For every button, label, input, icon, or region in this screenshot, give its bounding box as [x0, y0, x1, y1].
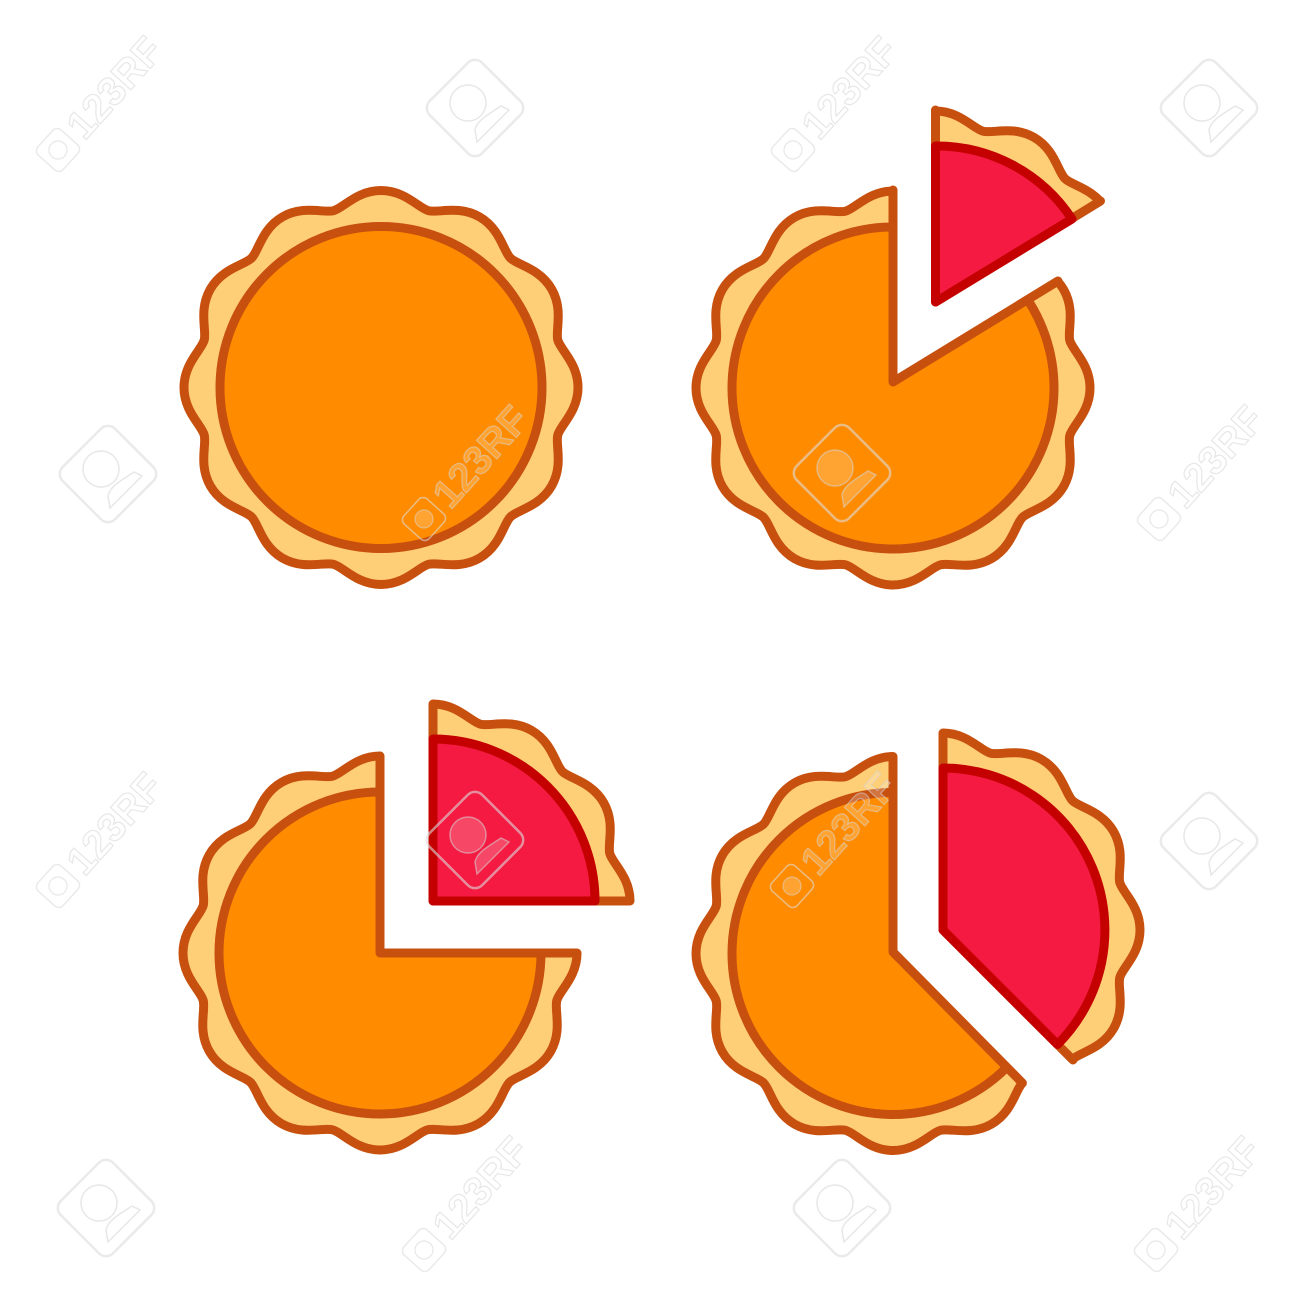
filling: whole pie: [220, 226, 542, 548]
slice: one sixth: [931, 106, 1105, 306]
watermark: 123RF text marks: 123RF: [793, 29, 906, 148]
watermark: 123RF text marks: 123RF: [1156, 1129, 1269, 1248]
pie: one quarter removed: [183, 704, 630, 1150]
watermark: 123RF text marks: 123RF: [58, 765, 171, 884]
pie: whole: [184, 190, 578, 584]
slice: one quarter: [428, 700, 634, 906]
pie: one sixth removed: [696, 110, 1132, 585]
watermark: 123RF text marks: 123RF: [1159, 398, 1272, 517]
pie body: remaining five sixths: [696, 190, 1090, 585]
pie: three eighths removed: [696, 733, 1140, 1150]
pie body: remaining five eighths: [692, 752, 1027, 1155]
watermark: 123RF text marks: 123RF: [424, 1129, 537, 1248]
crust: whole pie: [184, 190, 578, 584]
watermark: 123RF text marks: 123RF: [58, 29, 171, 148]
slice: three eighths: [938, 728, 1144, 1064]
pie body: remaining three quarters: [183, 756, 577, 1150]
watermark: 123RF text marks: 123RF: [792, 765, 905, 884]
watermark: 123RF text marks: 123RF: [424, 398, 537, 517]
